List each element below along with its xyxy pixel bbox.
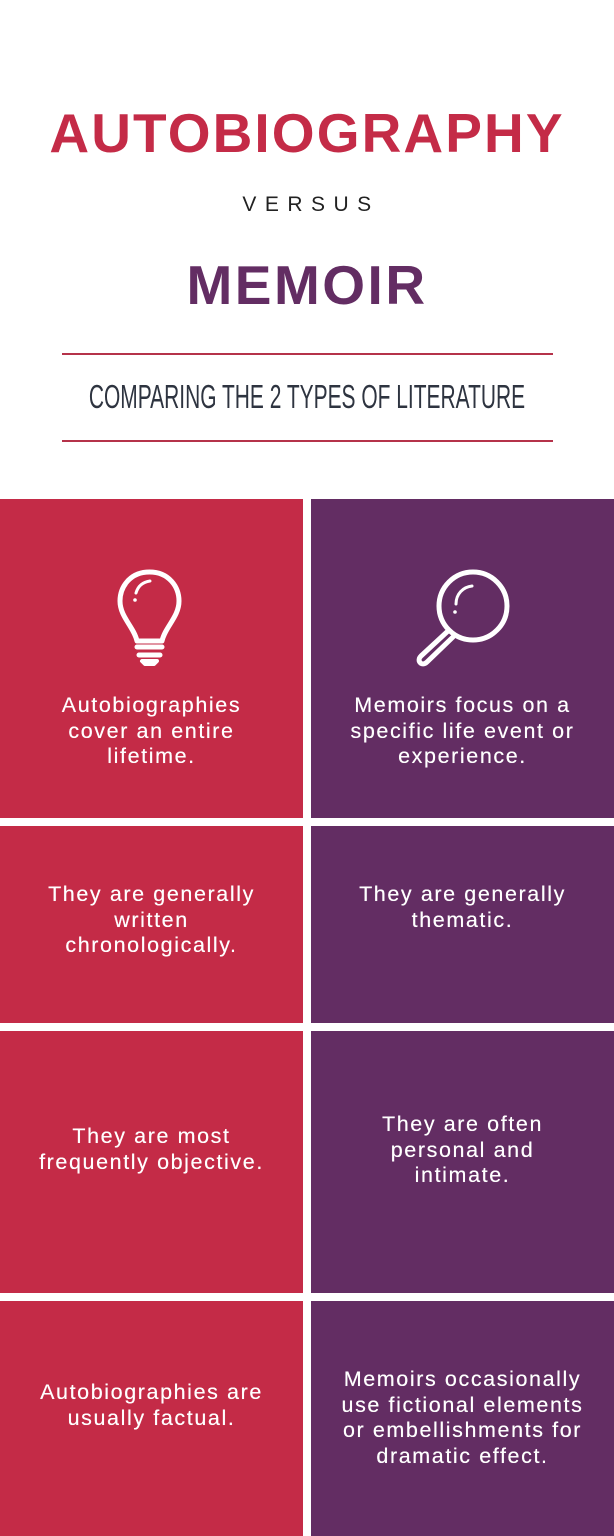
text: or embellishments for bbox=[343, 1418, 582, 1442]
bottom divider bbox=[62, 440, 553, 442]
text bbox=[48, 882, 255, 957]
text bbox=[382, 1112, 543, 1187]
text bbox=[350, 693, 574, 768]
title: memoir: MEMOIR bbox=[186, 254, 428, 316]
text: specific life event or bbox=[350, 718, 574, 742]
icon: light bulb bbox=[118, 570, 182, 666]
panel: row3 left objective bbox=[0, 1031, 303, 1293]
text bbox=[342, 1367, 583, 1468]
text bbox=[39, 1124, 264, 1174]
text: thematic. bbox=[412, 908, 513, 932]
text: They are generally bbox=[359, 882, 566, 906]
text: lifetime. bbox=[107, 744, 196, 768]
text: written bbox=[114, 908, 189, 932]
text: chronologically. bbox=[65, 933, 238, 957]
text bbox=[40, 1380, 263, 1430]
panel: row4 left factual bbox=[0, 1301, 303, 1536]
icon: magnifying glass bbox=[416, 570, 510, 666]
panel: row2 left chronological bbox=[0, 826, 303, 1023]
text: intimate. bbox=[415, 1163, 510, 1187]
subtitle: COMPARING THE 2 TYPES OF LITERATURE bbox=[89, 378, 525, 415]
text: usually factual. bbox=[68, 1406, 235, 1430]
text: They are generally bbox=[48, 882, 255, 906]
text: Autobiographies bbox=[62, 693, 241, 717]
panel: row1 left autobiography lifetime bbox=[0, 499, 303, 818]
panel: row1 right memoir event bbox=[311, 499, 614, 818]
text: cover an entire bbox=[68, 718, 235, 742]
panel: row4 right fictional bbox=[311, 1301, 614, 1536]
text: use fictional elements bbox=[342, 1392, 583, 1416]
panel: row3 right personal bbox=[311, 1031, 614, 1293]
text: personal and bbox=[391, 1138, 534, 1162]
text: Memoirs occasionally bbox=[344, 1367, 581, 1391]
panel: row2 right thematic bbox=[311, 826, 614, 1023]
title: autobiography: AUTOBIOGRAPHY bbox=[49, 102, 565, 164]
top divider bbox=[62, 353, 553, 355]
text bbox=[62, 693, 241, 768]
text: experience. bbox=[398, 744, 527, 768]
versus: VERSUS bbox=[242, 193, 380, 216]
text: They are most bbox=[72, 1124, 231, 1148]
text: frequently objective. bbox=[39, 1150, 264, 1174]
text bbox=[359, 882, 566, 932]
text: dramatic effect. bbox=[376, 1444, 549, 1468]
text: They are often bbox=[382, 1112, 543, 1136]
text: Memoirs focus on a bbox=[354, 693, 571, 717]
text: Autobiographies are bbox=[40, 1380, 263, 1404]
